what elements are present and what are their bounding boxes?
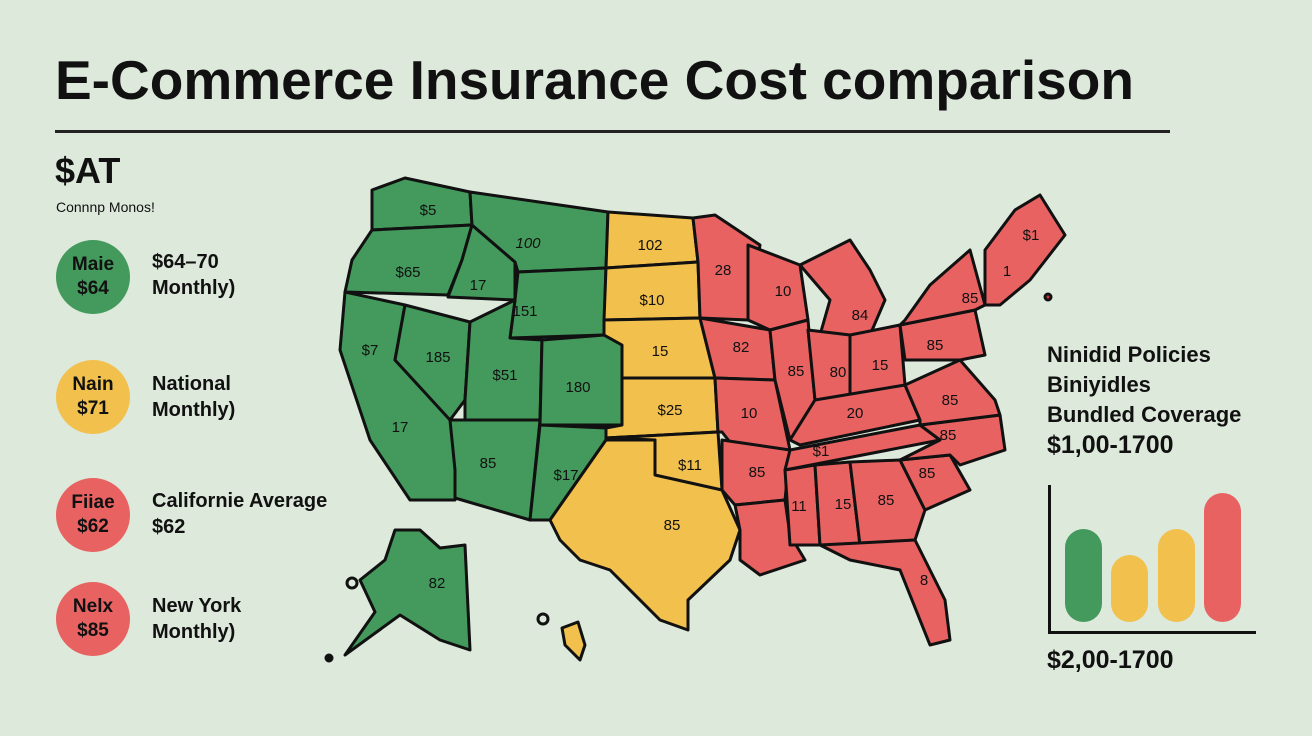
legend item: California: $62	[77, 516, 109, 537]
legend item: California: $62	[152, 516, 185, 538]
state values: 151	[512, 303, 538, 320]
central region	[550, 212, 740, 660]
right text block	[1047, 342, 1241, 459]
state values: $25	[657, 402, 683, 419]
legend item: California: Fiiae	[71, 492, 115, 513]
state values: 85	[664, 517, 680, 534]
state values: 85	[940, 427, 956, 444]
subtitle: $AT	[55, 150, 120, 191]
right text block: Ninidid Policies	[1047, 342, 1211, 367]
legend item: yellow	[56, 360, 235, 434]
state values: $51	[492, 367, 518, 384]
state values: $7	[362, 342, 378, 359]
legend item: green: $64–70	[152, 251, 219, 273]
legend item: yellow: $71	[77, 398, 109, 419]
chart caption: $2,00-1700	[1047, 646, 1174, 674]
right text block: Biniyidles	[1047, 372, 1151, 397]
state values: $65	[395, 264, 421, 281]
state values: $1	[1023, 227, 1039, 244]
state values: 84	[852, 307, 868, 324]
state values: 82	[733, 339, 749, 356]
east region	[693, 195, 1065, 645]
state values: 17	[392, 419, 408, 436]
state values	[362, 202, 1039, 592]
state values: $10	[639, 292, 665, 309]
right text block: Bundled Coverage	[1047, 402, 1241, 427]
legend item: California	[56, 478, 327, 552]
state values: 80	[830, 364, 846, 381]
title: E-Commerce Insurance Cost comparison	[55, 49, 1134, 111]
state values: 15	[652, 343, 668, 360]
state values: 102	[637, 237, 663, 254]
state values: 10	[741, 405, 757, 422]
legend item: yellow: Monthly)	[152, 399, 235, 421]
state values: 85	[962, 290, 978, 307]
state values: 1	[1003, 263, 1011, 280]
legend item: yellow: Nain	[72, 374, 114, 395]
legend item: New York	[56, 582, 242, 656]
state values: 82	[429, 575, 445, 592]
legend item: green: Maie	[72, 254, 114, 275]
state values: 85	[919, 465, 935, 482]
legend item: New York: New York	[152, 595, 241, 617]
bar chart	[1048, 485, 1256, 634]
state values: $11	[678, 457, 702, 474]
state values: 20	[847, 405, 863, 422]
state values: $1	[813, 443, 829, 460]
legend item: green	[56, 240, 235, 314]
legend item: New York: $85	[77, 620, 109, 641]
state values: 85	[749, 464, 765, 481]
state values: 180	[565, 379, 591, 396]
legend item: green: $64	[77, 278, 109, 299]
state values: 85	[480, 455, 496, 472]
state values: 85	[788, 363, 804, 380]
state values: 85	[942, 392, 958, 409]
caption: Connnp Monos!	[56, 199, 155, 215]
state values: 100	[515, 235, 541, 252]
legend item: yellow: National	[152, 373, 231, 395]
west region	[340, 178, 622, 655]
legend item: California: Californie Average	[152, 490, 327, 512]
state values: 11	[791, 498, 807, 515]
right text block: $1,00-1700	[1047, 431, 1174, 459]
state values: 8	[920, 572, 928, 589]
legend item: green: Monthly)	[152, 277, 235, 299]
state values: 85	[927, 337, 943, 354]
state values: $5	[420, 202, 436, 219]
state values: 10	[775, 283, 791, 300]
state values: 15	[835, 496, 851, 513]
state values: 28	[715, 262, 731, 279]
state values: 185	[425, 349, 451, 366]
state values: 15	[872, 357, 888, 374]
legend item: New York: Nelx	[73, 596, 113, 617]
state values: 85	[878, 492, 894, 509]
state values: $17	[553, 467, 579, 484]
legend item: New York: Monthly)	[152, 621, 235, 643]
state values: 17	[470, 277, 486, 294]
